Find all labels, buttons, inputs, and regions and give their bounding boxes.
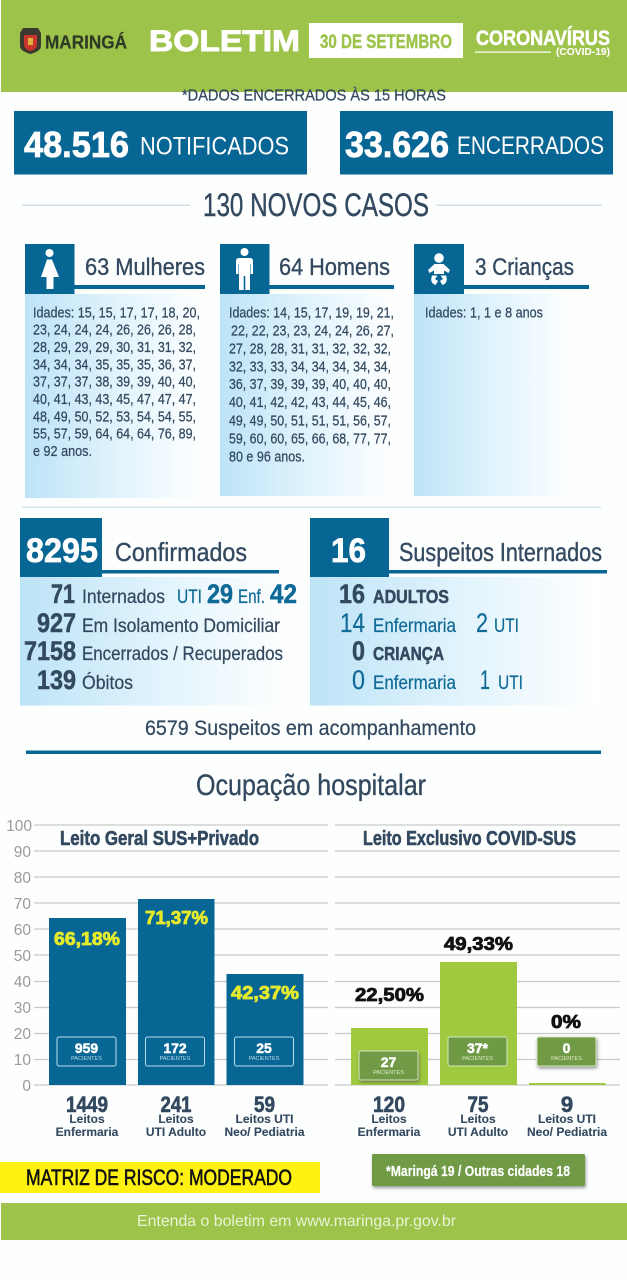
heading: new cases: 130 NOVOS CASOS bbox=[203, 187, 429, 223]
women ages: 34, 34, 34, 35, 35, 35, 36, 37, bbox=[33, 357, 196, 373]
bar: general neo/paediatric ICU: 42,37% bbox=[231, 983, 299, 1003]
chart: hospital occupancy bbox=[6, 818, 620, 1139]
women heading: 63 Mulheres bbox=[85, 254, 205, 281]
bar: general ward: 66,18% bbox=[54, 929, 120, 949]
confirmed total: 8295 bbox=[26, 532, 98, 570]
row: recovered bbox=[24, 636, 283, 666]
row: hospitalised: 71 bbox=[51, 579, 75, 609]
bed count: 75 adult ICU: Leitos bbox=[460, 1112, 496, 1126]
row: adult wards: 2 bbox=[476, 608, 488, 638]
heading: hospital occupancy: Ocupação hospitalar bbox=[196, 769, 426, 802]
bed count: 1449 ward: 1449 bbox=[66, 1092, 108, 1117]
women ages bbox=[33, 305, 200, 460]
data cutoff note: *DADOS ENCERRADOS ÀS 15 HORAS bbox=[182, 86, 446, 104]
men ages bbox=[229, 305, 394, 466]
footnote box bbox=[372, 1154, 585, 1186]
risk matrix banner bbox=[0, 1162, 320, 1193]
row: hospitalised: UTI bbox=[177, 587, 202, 608]
bed count: 59 paediatric ICU: Neo/ Pediatria bbox=[224, 1125, 305, 1139]
icon: baby bbox=[428, 253, 450, 285]
footnote box: *Maringá 19 / Outras cidades 18 bbox=[386, 1164, 570, 1180]
y axis labels: 30 bbox=[14, 1000, 31, 1017]
bed count: 9 paediatric ICU bbox=[527, 1092, 607, 1139]
men ages: 49, 49, 50, 51, 51, 51, 56, 57, bbox=[229, 413, 391, 429]
y axis labels: 10 bbox=[14, 1052, 31, 1069]
men ages: 22, 22, 23, 23, 24, 24, 26, 27, bbox=[231, 324, 394, 340]
bed count: 59 paediatric ICU: Leitos UTI bbox=[235, 1112, 294, 1126]
y axis labels bbox=[6, 818, 32, 1095]
bar: general ward: 959 bbox=[75, 1040, 98, 1056]
bar: covid adult ICU: 49,33% bbox=[444, 934, 513, 954]
bed count: 1449 ward: Leitos bbox=[69, 1112, 105, 1126]
women ages: 40, 41, 43, 43, 45, 47, 47, 47, bbox=[33, 392, 196, 408]
bed count: 75 adult ICU: UTI Adulto bbox=[448, 1125, 508, 1139]
confirmed heading: Confirmados bbox=[115, 537, 247, 567]
women ages: 55, 57, 59, 64, 64, 64, 76, 89, bbox=[33, 427, 196, 443]
logo wordmark: MARINGÁ bbox=[45, 32, 127, 52]
bed count: 1449 ward bbox=[56, 1092, 119, 1139]
stat box: notificados bbox=[14, 111, 307, 174]
bar: general neo/paediatric ICU: PACIENTES bbox=[249, 1056, 280, 1062]
row: children: CRIANÇA bbox=[373, 644, 444, 664]
stat box: notificados: NOTIFICADOS bbox=[140, 132, 289, 160]
bed count: 75 adult ICU bbox=[448, 1092, 508, 1139]
row: adult wards: UTI bbox=[494, 616, 519, 637]
icon: man bbox=[236, 248, 253, 290]
row: home isolation: Em Isolamento Domiciliar bbox=[82, 616, 281, 637]
footer band bbox=[1, 1203, 627, 1240]
bar: general ward: PACIENTES bbox=[71, 1056, 102, 1062]
stat box: notificados: 48.516 bbox=[24, 124, 129, 165]
stat box: encerrados bbox=[340, 111, 613, 174]
women ages: 23, 24, 24, 24, 26, 26, 26, 28, bbox=[33, 323, 196, 339]
bed count: 120 ward: Enfermaria bbox=[358, 1125, 421, 1139]
row: adults: ADULTOS bbox=[373, 587, 449, 607]
coronavirus label: (COVID-19) bbox=[556, 47, 610, 58]
y axis labels: 100 bbox=[6, 818, 32, 835]
men ages: 59, 60, 60, 65, 66, 68, 77, 77, bbox=[229, 431, 391, 447]
row: deaths: 139 bbox=[37, 665, 76, 695]
bar: covid neo/paediatric ICU: 0 bbox=[563, 1040, 571, 1056]
bar: general adult ICU: 172 bbox=[163, 1040, 187, 1056]
bar: covid neo/paediatric ICU bbox=[529, 1012, 606, 1085]
panel: suspected hospitalised bbox=[310, 518, 607, 706]
bar: general neo/paediatric ICU: 25 bbox=[256, 1040, 272, 1056]
row: home isolation bbox=[37, 608, 281, 638]
bar: covid ward: PACIENTES bbox=[373, 1070, 404, 1076]
row: adults bbox=[339, 579, 449, 609]
y axis labels: 40 bbox=[14, 974, 31, 991]
chart heading: covid beds: Leito Exclusivo COVID-SUS bbox=[363, 828, 576, 850]
date box bbox=[309, 23, 463, 58]
y axis labels: 50 bbox=[14, 948, 31, 965]
bar: covid ward: 22,50% bbox=[355, 985, 424, 1005]
bed count: 241 adult ICU: Leitos bbox=[158, 1112, 194, 1126]
men ages: 32, 33, 33, 34, 34, 34, 34, 34, bbox=[229, 360, 391, 376]
bar: covid adult ICU: 37* bbox=[467, 1040, 489, 1056]
y axis labels: 70 bbox=[14, 896, 31, 913]
men ages: Idades: 14, 15, 17, 19, 19, 21, bbox=[229, 305, 394, 321]
row: adult wards bbox=[340, 608, 519, 638]
bed count: 59 paediatric ICU bbox=[224, 1092, 305, 1139]
y axis labels: 0 bbox=[22, 1078, 31, 1095]
bed count: 9 paediatric ICU: Neo/ Pediatria bbox=[527, 1125, 607, 1139]
chart heading: general beds: Leito Geral SUS+Privado bbox=[60, 828, 259, 850]
bar: general adult ICU bbox=[138, 899, 214, 1085]
women ages: 48, 49, 50, 52, 53, 54, 54, 55, bbox=[33, 409, 196, 425]
row: deaths bbox=[37, 665, 133, 695]
row: hospitalised: Internados bbox=[82, 587, 165, 608]
row: children wards bbox=[352, 665, 523, 695]
header band bbox=[1, 0, 627, 92]
icon: Maringá coat of arms bbox=[20, 28, 41, 54]
children ages: Idades: 1, 1 e 8 anos bbox=[425, 305, 543, 321]
bed count: 59 paediatric ICU: 59 bbox=[254, 1092, 275, 1117]
bar: covid ward bbox=[351, 985, 428, 1085]
bed count: 120 ward: 120 bbox=[373, 1092, 405, 1117]
panel: men bbox=[220, 244, 395, 496]
coronavirus label bbox=[475, 27, 610, 58]
suspects under monitoring: 6579 Suspeitos em acompanhamento bbox=[145, 717, 476, 740]
bar: general ward bbox=[49, 918, 126, 1085]
row: adult wards: Enfermaria bbox=[373, 616, 456, 637]
men heading: 64 Homens bbox=[279, 254, 390, 281]
y axis labels: 90 bbox=[14, 844, 31, 861]
footer band: Entenda o boletim em www.maringa.pr.gov.br bbox=[137, 1213, 457, 1230]
row: children wards: 0 bbox=[352, 665, 365, 695]
bed count: 9 paediatric ICU: Leitos UTI bbox=[538, 1112, 596, 1126]
bed count: 120 ward bbox=[358, 1092, 421, 1139]
row: recovered: Encerrados / Recuperados bbox=[82, 644, 283, 665]
row: hospitalised: 29 bbox=[207, 579, 233, 609]
bar: covid adult ICU bbox=[440, 934, 517, 1085]
suspected total: 16 bbox=[331, 532, 366, 570]
men ages: 27, 28, 28, 31, 31, 32, 32, 32, bbox=[229, 342, 391, 358]
bar: covid ward: 27 bbox=[381, 1054, 396, 1070]
y axis labels: 20 bbox=[14, 1026, 31, 1043]
bar: general adult ICU: 71,37% bbox=[145, 908, 208, 928]
y axis labels: 80 bbox=[14, 870, 31, 887]
row: children wards: 1 bbox=[480, 665, 490, 695]
title: Boletim: BOLETIM bbox=[149, 25, 300, 58]
bar: general adult ICU: PACIENTES bbox=[160, 1056, 191, 1062]
bed count: 1449 ward: Enfermaria bbox=[56, 1125, 119, 1139]
men ages: 36, 37, 39, 39, 39, 40, 40, 40, bbox=[229, 377, 391, 393]
row: recovered: 7158 bbox=[24, 636, 76, 666]
bed count: 241 adult ICU: 241 bbox=[160, 1092, 192, 1117]
row: adult wards: 14 bbox=[340, 608, 365, 638]
bed count: 120 ward: Leitos bbox=[371, 1112, 407, 1126]
panel: women bbox=[25, 244, 205, 498]
row: children wards: Enfermaria bbox=[373, 673, 456, 694]
bed count: 9 paediatric ICU: 9 bbox=[561, 1092, 573, 1117]
bar: covid neo/paediatric ICU: PACIENTES bbox=[551, 1056, 582, 1062]
bed count: 241 adult ICU: UTI Adulto bbox=[146, 1125, 206, 1139]
row: deaths: Óbitos bbox=[82, 672, 133, 694]
women ages: 28, 29, 29, 29, 30, 31, 31, 32, bbox=[33, 340, 196, 356]
women ages: e 92 anos. bbox=[33, 444, 92, 460]
row: children: 0 bbox=[352, 636, 365, 666]
children heading: 3 Crianças bbox=[475, 254, 574, 281]
y axis labels: 60 bbox=[14, 922, 31, 939]
men ages: 80 e 96 anos. bbox=[229, 450, 305, 466]
row: hospitalised: Enf. bbox=[238, 587, 265, 608]
bar: general neo/paediatric ICU bbox=[226, 974, 304, 1085]
women ages: Idades: 15, 15, 17, 17, 18, 20, bbox=[33, 305, 200, 321]
row: adults: 16 bbox=[339, 579, 365, 609]
stat box: encerrados: 33.626 bbox=[345, 124, 449, 165]
risk matrix banner: MATRIZ DE RISCO: MODERADO bbox=[26, 1165, 292, 1190]
row: home isolation: 927 bbox=[37, 608, 76, 638]
bed count: 75 adult ICU: 75 bbox=[468, 1092, 488, 1117]
panel: confirmed bbox=[20, 518, 297, 706]
row: hospitalised: 42 bbox=[270, 579, 297, 609]
date box: 30 DE SETEMBRO bbox=[320, 31, 452, 53]
women ages: 37, 37, 37, 38, 39, 39, 40, 40, bbox=[33, 375, 196, 391]
row: children bbox=[352, 636, 444, 666]
panel: children bbox=[414, 244, 589, 496]
men ages: 40, 41, 42, 42, 43, 44, 45, 46, bbox=[229, 395, 391, 411]
bar: covid adult ICU: PACIENTES bbox=[462, 1056, 493, 1062]
bed count: 241 adult ICU bbox=[146, 1092, 206, 1139]
bar: covid neo/paediatric ICU: 0% bbox=[551, 1012, 581, 1032]
row: children wards: UTI bbox=[498, 673, 523, 694]
row: hospitalised bbox=[51, 579, 297, 609]
icon: woman bbox=[41, 249, 59, 289]
